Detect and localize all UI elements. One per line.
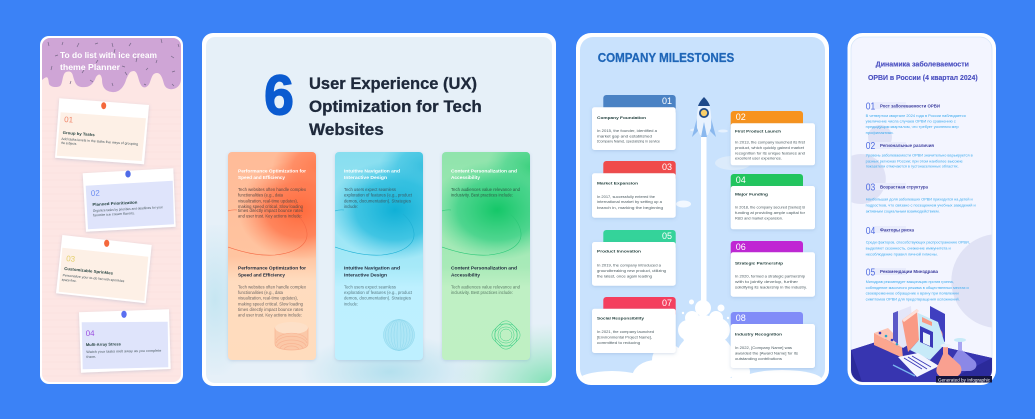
crate: [874, 333, 903, 358]
card: performance: Performance Optimization for: [238, 266, 306, 271]
item 05: своевременное обращение к врачу при появлении: [866, 292, 959, 296]
card: navigation: [334, 152, 424, 362]
milestone 03: 03: [662, 162, 672, 172]
item 02: Региональные различия: [880, 143, 934, 148]
card: performance: Performance Optimization for: [238, 168, 306, 173]
milestone 01: Company Foundation: [597, 115, 647, 120]
item 05: соблюдение масочного режима в общественных местах и: [866, 286, 969, 290]
icon: rounded diamond: [489, 318, 523, 352]
item 03: Наибольшая доля заболевших ОРВИ приходится на детей и: [866, 197, 973, 201]
document sheets: [930, 306, 945, 342]
card: personalization: inclusivity. Best practices include:: [451, 290, 513, 295]
card: performance: visualization, real-time updates),: [238, 198, 298, 203]
card 03: space-free.: [61, 278, 77, 283]
number 6: 6: [264, 64, 294, 128]
item 04: 04: [866, 226, 876, 237]
milestone 08: Industry Recognition: [735, 332, 783, 336]
card 04: 04: [86, 329, 95, 338]
milestone 07: Social Responsibility: [597, 316, 645, 320]
card: performance: Speed and Efficiency: [238, 272, 285, 277]
item 01: профилактики.: [866, 131, 894, 135]
item 05: симптомов ОРВИ для предотвращения осложнений.: [866, 298, 960, 302]
card: personalization: inclusivity. Best practices include:: [451, 193, 513, 198]
milestone 01: market gap and established: [597, 134, 652, 138]
milestone 01: [592, 95, 676, 150]
card 02: [83, 168, 176, 232]
card: navigation: Interactive Design: [344, 272, 387, 277]
card 03: 03: [66, 254, 76, 264]
card 03: [56, 235, 152, 303]
milestone 08: 08: [736, 313, 746, 323]
panel: company milestones: [576, 33, 829, 396]
card: performance: Tech websites often handle complex: [238, 187, 307, 192]
milestone 05: Product Innovation: [597, 249, 642, 254]
milestone 02: product, which quickly gained market: [735, 146, 805, 150]
icon: rocket: [692, 97, 716, 137]
milestone 06: Strategic Partnership: [735, 260, 784, 266]
milestone 03: [592, 161, 676, 218]
card 02: Organize tasks by priorities and deadlines for your: [93, 205, 164, 213]
milestone 01: [Company Name], specializing in service: [597, 140, 660, 144]
heading: [309, 74, 482, 139]
item 03: 03: [866, 182, 876, 194]
item 02: Уровень заболеваемости ОРВИ значительно варьируется в: [866, 154, 973, 158]
icing drip: [42, 38, 181, 92]
card: performance: Tech websites often handle complex: [238, 284, 307, 289]
panel title: [60, 50, 157, 72]
card: navigation: Intuitive Navigation and: [344, 266, 400, 271]
item 01: предыдущим кварталом, что требует усиления мер: [866, 125, 959, 129]
books: [893, 306, 913, 348]
card: personalization: Content Personalization and: [451, 168, 517, 173]
card: performance: functionalities (e.g., data: [238, 193, 284, 198]
card: navigation: exploration of features (e.g., product: [344, 193, 413, 198]
item 02: разных регионах России; при этом наиболее высокие: [866, 159, 963, 163]
illustration: laboratory: [851, 306, 992, 382]
card 02: favorite ice cream flavors.: [93, 211, 135, 217]
item 03: активным социальным взаимодействием.: [866, 209, 940, 213]
background circles: [852, 125, 992, 328]
card: performance: making speed critical. Slow loading: [238, 301, 304, 306]
card: personalization: Tech audiences value relevance and: [451, 187, 521, 192]
milestone 03: branch in, marking the beginning: [597, 206, 663, 210]
card 04: Watch your tasks melt away as you complete: [86, 349, 161, 354]
heading: Websites: [309, 120, 384, 139]
card: navigation: Interactive Design: [344, 175, 387, 180]
platform: [851, 341, 992, 382]
panel title: To do list with ice cream: [60, 50, 157, 60]
milestone 05: groundbreaking new product, utilizing: [597, 269, 666, 273]
card: personalization: [441, 152, 531, 362]
milestone 04: In 2018, the company secured [Series] B: [735, 206, 805, 210]
item 02: [866, 141, 973, 169]
card 01: Add tasks levels in the tasks five ways of grouping: [61, 137, 138, 146]
item 01: Рост заболеваемости ОРВИ: [880, 104, 940, 108]
small clouds: [715, 156, 751, 170]
title: ОРВИ в России (4 квартал 2024): [868, 75, 978, 82]
milestone 05: In 2019, the company introduced a: [597, 264, 662, 268]
card: personalization: Tech audiences value relevance and: [451, 284, 521, 289]
paper: [898, 353, 939, 377]
card: performance: [227, 152, 317, 362]
milestone 01: In 2015, the founder, identified a: [597, 129, 658, 133]
card 03: Personalize your to-do list with sprinkles: [62, 273, 125, 283]
item 03: Возрастная структура: [880, 184, 929, 190]
credit label: Generated by Infographic: [938, 377, 991, 382]
card 02: 02: [91, 189, 101, 198]
milestone 02: [731, 111, 815, 165]
item 01: [866, 102, 966, 135]
milestone 05: [592, 230, 676, 286]
milestone 07: 07: [662, 298, 672, 308]
milestone 02: In 2013, the company launched its first: [735, 140, 806, 144]
card 01: the subjects.: [61, 141, 77, 146]
item 04: Факторы риска: [880, 228, 915, 232]
card: navigation: exploration of features (e.g., product: [344, 290, 413, 295]
milestone 05: 05: [662, 231, 672, 241]
item 01: 01: [866, 102, 876, 112]
milestone 02: recognition for its unique features and: [735, 151, 805, 155]
item 03: подростков, что связано с посещением учебных заведений и: [866, 203, 976, 207]
milestone 04: funding at providing ample capital for: [735, 211, 806, 215]
flasks: [952, 342, 976, 371]
item 05: [866, 268, 969, 302]
milestone 07: [592, 297, 676, 353]
card: performance: times directly impact bounce rates: [238, 307, 303, 312]
milestone 04: Major Funding: [735, 191, 769, 196]
milestone 08: awarded the [Award Name] for its: [735, 352, 798, 356]
card: personalization: Accessibility: [451, 272, 480, 277]
milestone 07: In 2021, the company launched: [597, 330, 654, 334]
card 01: 01: [64, 115, 74, 125]
item 04: Среди факторов, способствующих распространению ОРВИ,: [866, 240, 970, 244]
card: navigation: Intuitive Navigation and: [344, 168, 400, 173]
card: navigation: demos, documentation). Strategies: [344, 198, 411, 203]
item 01: В четвертом квартале 2024 года в России наблюдается: [866, 114, 966, 118]
milestone 02: First Product Launch: [735, 128, 782, 133]
item 03: [866, 182, 976, 213]
card: personalization: Accessibility: [451, 175, 480, 180]
milestone 06: In 2020, formed a strategic partnership: [735, 274, 805, 278]
card: navigation: demos, documentation). Strategies: [344, 296, 411, 301]
card: navigation: Tech users expect seamless: [344, 187, 396, 192]
milestone 01: 01: [662, 96, 672, 106]
title: [868, 60, 978, 82]
item 04: несоблюдение правил личной гигиены.: [866, 252, 938, 256]
panel: ice cream planner: [40, 36, 183, 384]
sprinkles: [48, 39, 179, 86]
milestone 08: [731, 312, 815, 368]
card: navigation: Tech users expect seamless: [344, 284, 396, 289]
item 02: 02: [866, 141, 876, 152]
title: Динамика заболеваемости: [876, 60, 969, 68]
card 01: Group by Tasks: [63, 130, 96, 137]
milestone 07: [Environmental Project Name],: [597, 336, 652, 340]
item 05: Минздрав рекомендует вакцинацию против гриппа,: [866, 280, 954, 284]
card: performance: and user trust. Key actions include:: [238, 313, 302, 318]
title: COMPANY MILESTONES: [598, 51, 734, 65]
item 04: выделяют сезонность, снижение иммунитета и: [866, 246, 951, 250]
milestone 02: 02: [736, 112, 746, 122]
card: performance: Speed and Efficiency: [238, 175, 285, 180]
card 01: [55, 98, 149, 164]
item 04: [866, 226, 970, 256]
milestone 06: with to jointly develop, further: [735, 280, 799, 284]
card: navigation: include:: [344, 301, 358, 306]
milestone 03: In 2017, successfully entered the: [597, 195, 655, 199]
card: performance: and user trust. Key actions include:: [238, 213, 302, 218]
milestone 06: 06: [736, 242, 746, 252]
milestone 05: the latest, once again leading: [597, 274, 652, 278]
panel: UX optimization: [202, 33, 578, 386]
card 03: Customizable Sprinkles: [64, 266, 114, 276]
heading: User Experience (UX): [309, 74, 477, 93]
icon: sphere: [384, 320, 414, 350]
card 04: [79, 309, 171, 373]
milestone 07: committed to reducing: [597, 341, 640, 345]
milestone 06: [731, 241, 815, 297]
milestone 08: outstanding contributions: [735, 357, 782, 361]
milestone 03: Market Expansion: [597, 180, 639, 185]
milestone 04: [731, 174, 815, 229]
card: performance: times directly impact bounce rates: [238, 208, 303, 213]
milestone 04: 04: [736, 175, 746, 185]
item 01: увеличение числа случаев ОРВИ по сравнению с: [866, 120, 956, 124]
card: performance: functionalities (e.g., data: [238, 290, 284, 295]
card 04: Multi-Array Stress: [86, 341, 122, 347]
milestone 02: excellent user experience.: [735, 157, 782, 161]
milestone 08: In 2022, [Company Name] was: [735, 346, 792, 350]
card: performance: visualization, real-time updates),: [238, 296, 298, 301]
milestone 04: R&D and market expansion.: [735, 216, 783, 220]
panel title: theme Planner: [60, 62, 121, 72]
card: performance: making speed critical. Slow loading: [238, 204, 304, 209]
card 04: them.: [86, 355, 96, 359]
item 05: 05: [866, 268, 876, 278]
card 02: Planned Prioritization: [92, 200, 138, 207]
milestone 03: international market by setting up a: [597, 200, 663, 204]
card: navigation: include:: [344, 204, 358, 209]
item 05: Рекомендации Минздрава: [880, 269, 939, 274]
card: personalization: Content Personalization and: [451, 266, 517, 271]
panel: ARI dynamics in Russia: [848, 33, 996, 385]
smoke clouds: [576, 135, 825, 396]
heading: Optimization for Tech: [309, 97, 482, 116]
icon: cylinder: [275, 322, 308, 350]
milestone 06: solidifying its leadership in the industry.: [735, 286, 807, 290]
item 02: показатели отмечаются в густонаселенных областях.: [866, 165, 959, 169]
